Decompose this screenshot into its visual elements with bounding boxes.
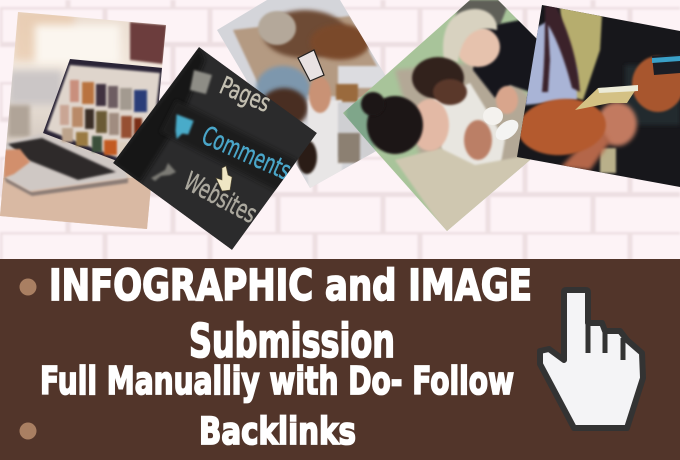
icon: pages — [190, 70, 212, 94]
banner panel — [0, 259, 680, 460]
icon: pointing cursor — [216, 166, 232, 191]
hand on trackpad — [4, 149, 30, 178]
heading line 1: INFOGRAPHIC and IMAGE — [49, 261, 532, 311]
background: white brick wall — [0, 0, 680, 262]
heading line 2: Submission — [189, 314, 395, 368]
photo: three women with coffee — [340, 0, 545, 235]
bullet: top — [20, 278, 36, 296]
gallery thumbnails — [60, 80, 147, 156]
subheading line 2: Backlinks — [199, 410, 356, 453]
menu label: Comments: Comments — [197, 121, 295, 187]
photo: hands holding smartphones — [515, 0, 680, 190]
smartphone in hand — [298, 50, 324, 81]
icon: pin — [151, 163, 176, 181]
subheading line 1: Full Manualliy with Do- Follow — [40, 359, 514, 403]
photo: blurred WordPress menu close-up — [113, 47, 317, 250]
icon: comment bubble — [176, 115, 193, 138]
bullet: bottom — [20, 422, 36, 440]
photo: laptop with image gallery — [0, 10, 170, 236]
menu label: Websites: Websites — [179, 167, 262, 230]
icon: pointing hand cursor — [540, 290, 643, 428]
smartphone — [575, 88, 635, 110]
photo: overhead group with smartphone — [217, 0, 386, 188]
menu label: Pages: Pages — [216, 71, 275, 118]
